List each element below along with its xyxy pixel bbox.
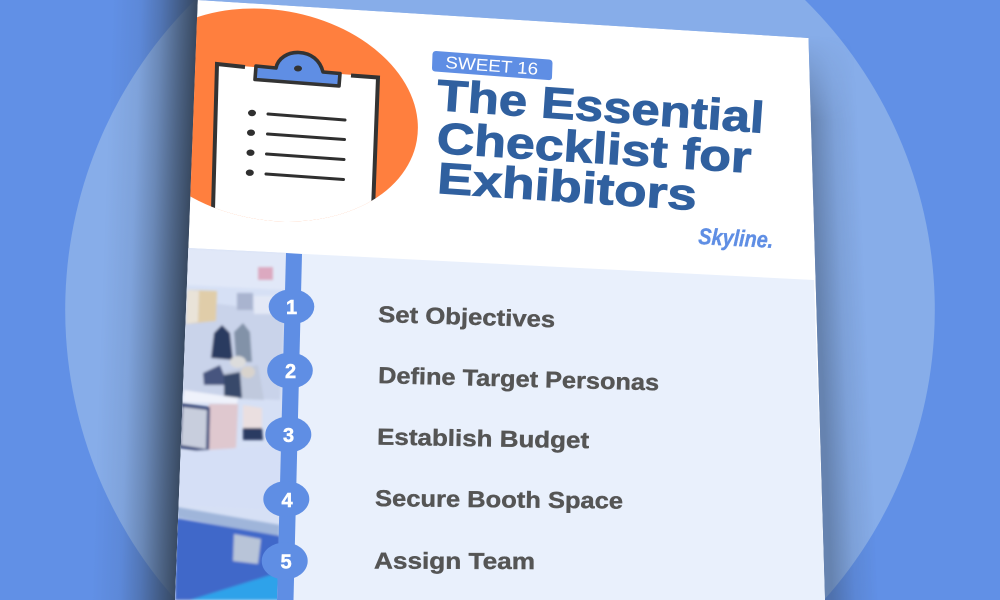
step 2: 2 [285,361,296,383]
photo strip [175,248,290,600]
item 4: Secure Booth Space [375,485,623,514]
step 4: 4 [281,490,293,512]
rail [176,507,280,537]
booth counter [183,390,238,404]
title [438,79,762,210]
clipboard clip [255,52,340,86]
paper sheet [175,0,825,600]
paper shadow right [809,48,868,600]
checklist paper [107,0,825,600]
item 3: Establish Budget [377,424,590,453]
step 3 [265,416,311,452]
paper shadow left [90,0,198,600]
item 5: Assign Team [374,548,535,574]
blue floor [175,518,280,600]
clipboard outline [213,64,378,210]
visitors [211,325,233,360]
checklist items [374,301,659,574]
step 3: 3 [283,425,294,447]
panel: list background [175,248,825,600]
item 2: Define Target Personas [378,362,659,395]
badge: sweet 16: SWEET 16 [445,53,539,79]
logo: Skyline: Skyline. [698,223,774,253]
step 1 [269,289,314,324]
step 1: 1 [286,297,297,319]
checklist bullets and lines [246,110,345,180]
step 2 [267,352,313,388]
title: The Essential [435,71,766,143]
step 5: 5 [280,552,292,574]
vertical timeline [262,253,314,600]
badge: sweet 16 [432,51,552,80]
clipboard sheet [213,66,376,222]
step 4 [263,481,309,517]
item 1: Set Objectives [378,301,556,332]
icon: clipboard on orange circle [190,8,418,222]
title: Exhibitors [436,154,699,220]
title: Checklist for [435,114,753,183]
step 5 [262,542,308,580]
orange circle [190,8,418,222]
timeline rail [277,253,302,600]
